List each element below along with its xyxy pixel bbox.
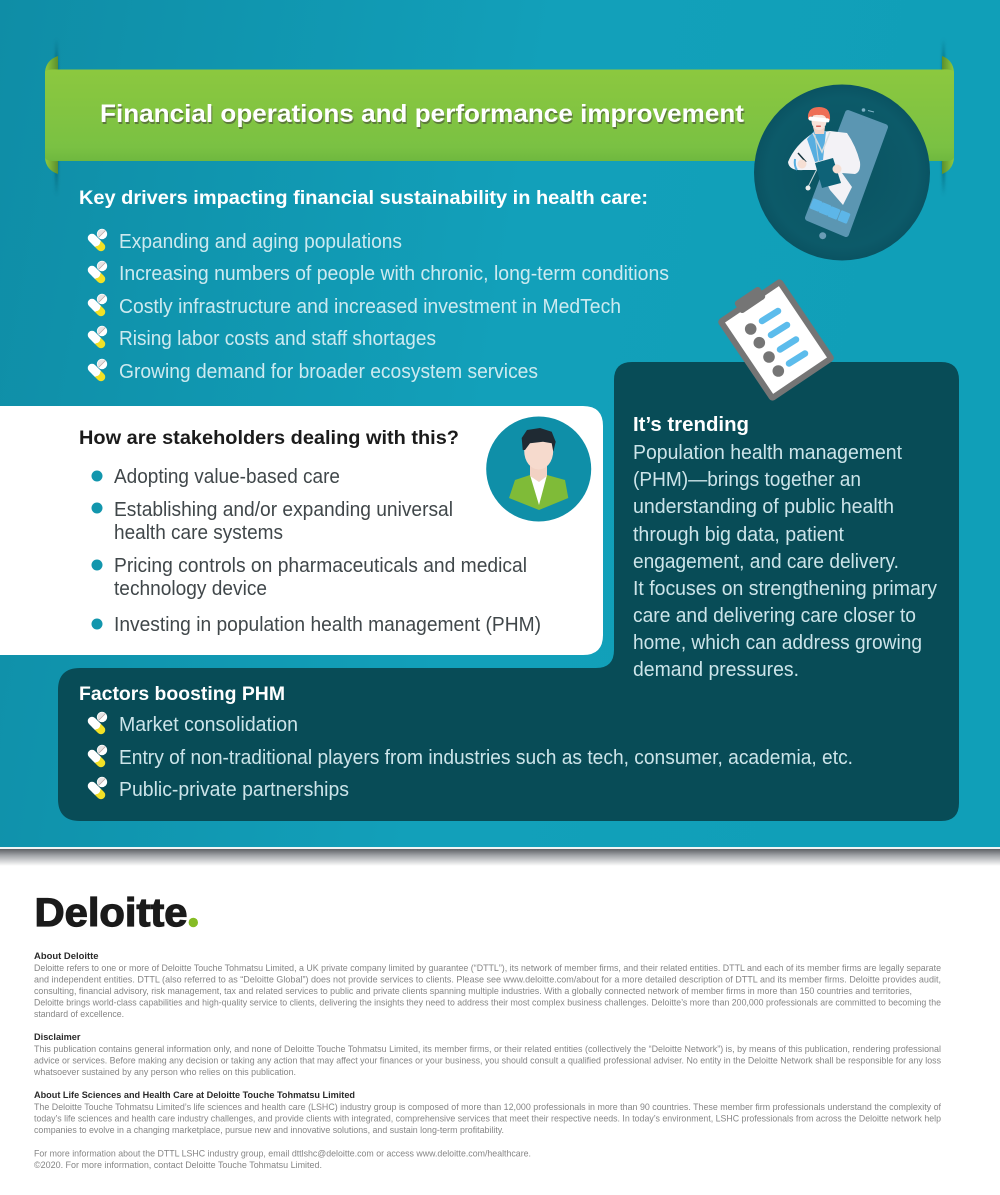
- text block: population health management: home, which can address growing: [633, 632, 922, 654]
- footer shadow band: [0, 847, 1000, 866]
- text block: about life sciences and health care: companies to evolve in a changing marketplace, pursue new and innovative solutions, and sustain long-term profitability.: [34, 1125, 504, 1136]
- heading: factors boosting PHM: Factors boosting PHM: [79, 683, 285, 705]
- text block: about life sciences and health care: today’s life sciences and health care industry challenges, and provide clients with integrated, comprehensive services that meet their respective needs. In today’s environment, LSHC professionals from across the Deloitte network help: [34, 1114, 941, 1124]
- text block: disclaimer: Disclaimer: [34, 1032, 81, 1043]
- text block: about Deloitte: About Deloitte: [34, 951, 98, 962]
- list: stakeholder responses: [92, 466, 541, 636]
- text block: population health management: through big data, patient: [633, 524, 844, 546]
- icon: doctor emerging from phone: [754, 84, 930, 260]
- text block: about Deloitte: [34, 951, 941, 1020]
- list: key drivers: Growing demand for broader ecosystem services: [119, 361, 538, 383]
- text block: disclaimer: This publication contains general information only, and none of Deloitte Touche Tohmatsu Limited, its member firms, or their related entities (collectively the “Deloitte Network”) is, by means of this publication, rendering professional: [34, 1044, 941, 1055]
- text block: contact and copyright: [34, 1148, 531, 1171]
- list: key drivers: Expanding and aging populations: [119, 231, 402, 253]
- list: factors boosting PHM: [92, 712, 853, 801]
- list: stakeholder responses: health care systems: [114, 522, 283, 544]
- list: stakeholder responses: Investing in population health management (PHM): [114, 614, 541, 636]
- list: factors boosting PHM: Public-private partnerships: [119, 779, 349, 801]
- list: key drivers: Rising labor costs and staff shortages: [119, 328, 436, 350]
- panel: dark L-shaped trending and factors panel: [58, 362, 959, 821]
- text block: about Deloitte: and independent entities. DTTL (also referred to as “Deloitte Global”) does not provide services to clients. Please see www.deloitte.com/about for a more detailed description of DTTL and its member firms. Deloitte provides audit,: [34, 974, 941, 986]
- text block: disclaimer: [33, 1032, 941, 1078]
- title: Financial operations and performance improvement: [100, 100, 745, 128]
- text block: population health management: care and delivering care closer to: [633, 605, 916, 627]
- Deloitte logo: Deloitte: [34, 891, 188, 935]
- green ribbon banner: [45, 38, 954, 196]
- heading: stakeholders: How are stakeholders dealing with this?: [79, 427, 459, 449]
- text block: population health management: It focuses on strengthening primary: [633, 578, 937, 600]
- text block: about life sciences and health care: The Deloitte Touche Tohmatsu Limited’s life sciences and health care (LSHC) industry group is composed of more than 12,000 professionals in more than 90 countries. These member firm professionals understand the complexity of: [34, 1102, 941, 1113]
- text block: contact and copyright: ©2020. For more information, contact Deloitte Touche Tohmatsu Limited.: [34, 1160, 322, 1171]
- panel: stakeholders: [0, 406, 603, 655]
- text block: population health management: [633, 442, 937, 681]
- heading: key drivers: Key drivers impacting financial sustainability in health care:: [79, 187, 648, 209]
- heading: it's trending: It’s trending: [633, 414, 749, 436]
- teal background: [0, 0, 1000, 847]
- text block: population health management: engagement, and care delivery.: [633, 551, 899, 573]
- list: key drivers: [92, 229, 669, 383]
- list: key drivers: Increasing numbers of people with chronic, long-term conditions: [119, 263, 669, 285]
- list: stakeholder responses: Establishing and/or expanding universal: [114, 499, 453, 521]
- text block: about life sciences and health care: About Life Sciences and Health Care at Deloitte Touche Tohmatsu Limited: [34, 1090, 355, 1101]
- list: stakeholder responses: Pricing controls on pharmaceuticals and medical: [114, 555, 527, 577]
- text block: about Deloitte: standard of excellence.: [34, 1009, 124, 1020]
- text block: disclaimer: whatsoever sustained by any person who relies on this publication.: [33, 1067, 296, 1078]
- list: key drivers: Costly infrastructure and increased investment in MedTech: [119, 296, 621, 318]
- text block: about life sciences and health care: [34, 1090, 941, 1136]
- text block: population health management: (PHM)—brings together an: [633, 469, 861, 491]
- list: factors boosting PHM: Market consolidation: [119, 714, 298, 736]
- text block: about Deloitte: Deloitte refers to one or more of Deloitte Touche Tohmatsu Limited, a UK private company limited by guarantee (“DTTL”), its network of member firms, and their related entities. DTTL and each of its member firms are legally separate: [34, 963, 941, 974]
- text block: about Deloitte: Deloitte brings world-class capabilities and high-quality service to clients, delivering the insights they need to address their most complex business challenges. Deloitte’s more than 200,000 professionals are committed to becoming the: [34, 998, 941, 1008]
- icon: clipboard: [717, 278, 835, 402]
- text block: contact and copyright: For more information about the DTTL LSHC industry group, email dttlshc@deloitte.com or access www.deloitte.com/healthcare.: [34, 1148, 531, 1160]
- text block: population health management: understanding of public health: [633, 496, 894, 518]
- icon: person avatar: [486, 416, 591, 522]
- list: factors boosting PHM: Entry of non-traditional players from industries such as tech, consumer, academia, etc.: [119, 747, 853, 769]
- text block: population health management: Population health management: [633, 442, 902, 464]
- list: stakeholder responses: Adopting value-based care: [114, 466, 340, 488]
- text block: population health management: demand pressures.: [633, 659, 799, 681]
- text block: disclaimer: advice or services. Before making any decision or taking any action that may affect your finances or your business, you should consult a qualified professional adviser. No entity in the Deloitte Network shall be responsible for any loss: [34, 1056, 941, 1066]
- text block: about Deloitte: consulting, financial advisory, risk management, tax and related services to public and private clients spanning multiple industries. With a globally connected network of member firms in more than 150 countries and territories,: [34, 986, 912, 997]
- list: stakeholder responses: technology device: [114, 578, 267, 600]
